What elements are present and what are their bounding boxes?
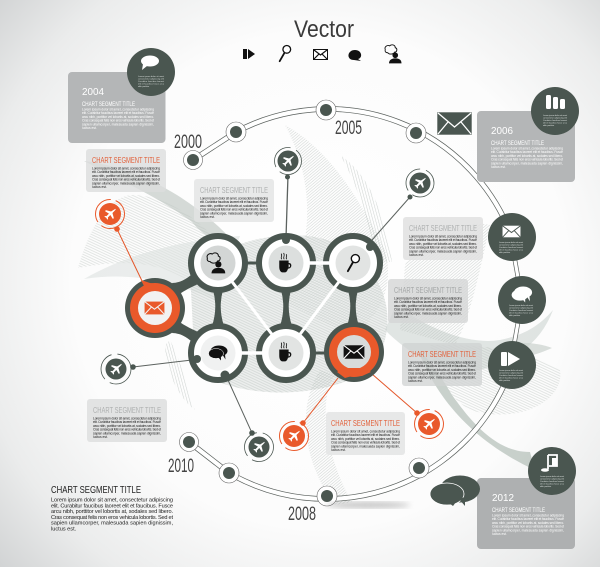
circle: 2004 chat: elit et faucibus fusce arcu [138,82,164,86]
hub ring: coffee bottom [259,326,313,380]
panel: 2006: elit. Curabitur faucibus laoreet elit et faucibus. Fusce [491,150,563,154]
text box: grey title top centre: Lorem ipsum dolor sit amet, consectetur adipiscing [200,196,268,200]
text block: bottom left: sapien ullamcorper, malesuada sapien dignissim, [51,521,173,527]
text box: grey title top centre: arcu nibh, porttitor vel lobortis at, sodales sed libero. [200,204,268,208]
text box: orange title right lower [402,343,482,386]
circle: mail: Lorem ipsum dolor sit amet [499,241,523,244]
text block: bottom left: elit. Curabitur faucibus laoreet elit et faucibus. Fusce [51,503,173,509]
panel: 2004: elit. Curabitur faucibus laoreet elit et faucibus. Fusce [82,111,154,115]
toolbar icons [243,45,402,63]
text box: grey title top centre: elit. Curabitur faucibus laoreet elit et faucibus. Fusce [200,200,268,204]
node 2010 start [180,432,198,452]
text box: orange title bottom centre: Lorem ipsum dolor sit amet, consectetur adipiscing [331,430,400,434]
text block: bottom left: Lorem ipsum dolor sit amet, consectetur adipiscing [51,498,173,504]
text box: grey title right upper: arcu nibh, porttitor vel lobortis at, sodales sed libero. [409,242,477,246]
text box: orange title bottom centre [326,412,405,455]
hub ring: person [191,236,245,290]
circle: 2006 bars: elit et faucibus fusce arcu [543,122,567,124]
node 2005 [316,100,336,120]
text box: grey title right upper: Cras consequat felis non eros vehicula lobortis. Sed et [409,246,477,250]
text box: grey title right middle: elit. Curabitur faucibus laoreet elit et faucibus. Fusce [394,300,462,304]
text box: orange title right lower: Lorem ipsum dolor sit amet, consectetur adipiscing [408,360,476,364]
text box: grey title right middle [388,279,468,323]
text box: orange title upper left: Cras consequat felis non eros vehicula lobortis. Sed et [92,178,160,182]
panel: 2006: arcu nibh, porttitor vel lobortis at, sodales sed libero. [491,154,563,158]
timeline ring [189,109,522,499]
panel: 2004: 2004 [82,87,104,98]
text box: orange title upper left: elit. Curabitur faucibus laoreet elit et faucibus. Fusce [92,170,160,174]
panel: 2004: Lorem ipsum dolor sit amet, consectetur adipiscing [82,108,154,112]
icon: mail [314,50,328,60]
node 2000 [226,122,246,142]
hub connectors: white breaks [230,263,341,353]
plane marker: orange bottom [280,420,308,450]
text box: orange title bottom centre: arcu nibh, porttitor vel lobortis at, sodales sed libero. [331,437,400,441]
text block: bottom left: CHART SEGMENT TITLE [51,484,141,496]
circle: 2006 bars: nibh porttitor [543,124,554,127]
text box: grey title right upper: sapien ullamcorper, malesuada sapien dignissim, [409,249,477,253]
text box: grey title lower left: arcu nibh, porttitor vel lobortis at, sodales sed libero. [93,424,161,428]
hub connectors: dark [172,262,359,354]
text box: grey title right middle: sapien ullamcorper, malesuada sapien dignissim, [394,311,462,315]
circle: mail: consectetur adipiscing elit [499,244,523,246]
circle: chat: nibh porttitor [509,314,520,317]
circle: mail: nibh porttitor [499,251,510,254]
text block: bottom left: arcu nibh, porttitor vel lobortis at, sodales sed libero. [51,509,173,515]
year 2010: 2010 [168,456,194,477]
text box: grey title lower left: luctus est. [93,435,108,439]
icon: person with cloud [385,45,402,63]
panel: 2006: CHART SEGMENT TITLE [491,140,544,147]
node 2008 [317,486,337,506]
panel: 2004: CHART SEGMENT TITLE [82,101,135,108]
text box: orange title bottom centre: luctus est. [331,448,346,452]
text box: grey title right middle: Cras consequat felis non eros vehicula lobortis. Sed et [394,308,462,312]
text box: orange title right lower: Cras consequat felis non eros vehicula lobortis. Sed et [408,372,476,376]
panel: 2004: luctus est. [82,126,97,130]
plane marker: orange left [96,200,124,232]
panel: 2006 [477,111,575,182]
icon: play [243,49,255,59]
text box: grey title right upper [403,217,483,260]
connector lines [117,175,417,433]
circle: mail: Curabitur faucibus laoreet [499,246,523,249]
text box: orange title bottom centre: sapien ullamcorper, malesuada sapien dignissim, [331,444,400,448]
text box: grey title right middle: CHART SEGMENT TITLE [394,286,462,295]
text box: grey title lower left: elit. Curabitur faucibus laoreet elit et faucibus. Fusce [93,420,161,424]
panel: 2004: sapien ullamcorper, malesuada sapien dignissim, [82,122,154,126]
panel: 2006: Lorem ipsum dolor sit amet, consectetur adipiscing [491,146,563,150]
shadow under ring [326,502,410,508]
text box: orange title right lower: CHART SEGMENT TITLE [408,350,476,359]
text box: grey title right middle: Lorem ipsum dolor sit amet, consectetur adipiscing [394,296,462,300]
text box: grey title top centre: luctus est. [200,215,215,219]
circle: mail: elit et faucibus fusce arcu [499,248,523,252]
circle: 2006 bars: consectetur adipiscing elit [543,116,567,120]
plane marker: left [101,354,136,384]
panel: 2012: elit. Curabitur faucibus laoreet elit et faucibus. Fusce [492,517,564,521]
panel: 2012: Lorem ipsum dolor sit amet, consectetur adipiscing [492,514,564,518]
circle: 2004 chat: Curabitur faucibus laoreet [138,80,164,83]
circle: 2012 music: elit et faucibus fusce arcu [540,482,564,486]
text box: grey title lower left [87,399,167,442]
node 2010 [219,463,239,483]
text box: orange title upper left: arcu nibh, porttitor vel lobortis at, sodales sed libero. [92,174,160,178]
circle: chat [498,276,546,324]
node 2000 start [184,150,202,170]
text box: orange title upper left [86,149,166,192]
text box: orange title right lower: elit. Curabitur faucibus laoreet elit et faucibus. Fusce [408,364,476,368]
panel: 2004 [68,72,166,143]
text box: orange title bottom centre: CHART SEGMENT TITLE [331,419,400,428]
panel: 2006: Cras consequat felis non eros vehicula lobortis. Sed et [491,158,563,162]
text box: grey title lower left: CHART SEGMENT TITLE [93,406,161,415]
plane marker: bottom [244,430,274,462]
hub ring: orange mail [125,278,185,338]
panel: 2012: 2012 [492,493,514,504]
circle: 2006 bars: Lorem ipsum dolor sit amet [543,114,567,117]
plane marker: top centre [274,148,302,180]
text box: grey title top centre: Cras consequat felis non eros vehicula lobortis. Sed et [200,208,268,212]
hub ring: coffee top [259,236,313,290]
text box: grey title right middle: luctus est. [394,315,409,319]
circle: 2012 music: Lorem ipsum dolor sit amet [540,475,564,478]
circle: 2012 music: nibh porttitor [540,485,551,488]
circle: play: Lorem ipsum dolor sit amet [499,369,523,372]
circle: chat: Lorem ipsum dolor sit amet [509,304,533,307]
text block: bottom left [51,484,173,532]
text box: grey title top centre: CHART SEGMENT TITLE [200,186,268,195]
circle: mail [488,213,536,261]
circle: 2006 bars: Curabitur faucibus laoreet [543,119,567,122]
panel: 2012: luctus est. [492,532,507,536]
node 2005 end [406,123,426,143]
plane marker: top right [406,169,434,200]
circle: play [488,341,536,389]
panel: 2006: sapien ullamcorper, malesuada sapien dignissim, [491,161,563,165]
circle: 2006 bars [531,87,579,135]
text box: grey title right upper: elit. Curabitur faucibus laoreet elit et faucibus. Fusce [409,238,477,242]
text box: orange title right lower: luctus est. [408,379,423,383]
text box: grey title right upper: CHART SEGMENT TITLE [409,224,477,233]
text box: grey title lower left: Cras consequat felis non eros vehicula lobortis. Sed et [93,428,161,432]
circle: chat: consectetur adipiscing elit [509,306,533,310]
icon: magnifier [280,45,291,61]
circle: play: Curabitur faucibus laoreet [499,374,523,377]
circle: play: consectetur adipiscing elit [499,372,523,374]
year 2008: 2008 [288,504,316,525]
abstract wave mesh [78,125,560,505]
text block: bottom left: luctus est. [51,526,77,532]
icon: large chat bubbles [430,476,480,506]
text box: grey title lower left: Lorem ipsum dolor sit amet, consectetur adipiscing [93,416,161,420]
circle: 2012 music: consectetur adipiscing elit [540,478,564,480]
text box: orange title upper left: luctus est. [92,185,107,189]
circle: 2004 chat [127,48,175,96]
icon: large envelope [437,112,472,135]
text box: grey title right upper: Lorem ipsum dolor sit amet, consectetur adipiscing [409,234,477,238]
circle: play: elit et faucibus fusce arcu [499,376,523,380]
circle: 2012 music [528,447,576,495]
hub ring: orange mail dark [324,322,384,382]
hub ring: magnifier [326,236,380,290]
circle: play: nibh porttitor [499,379,510,382]
panel: 2012: sapien ullamcorper, malesuada sapien dignissim, [492,528,564,532]
circle: 2004 chat: nibh porttitor [138,85,149,88]
circle: chat: elit et faucibus fusce arcu [509,312,533,314]
timeline nodes [180,100,429,506]
year 2000: 2000 [174,132,202,153]
text box: orange title bottom centre: Cras consequat felis non eros vehicula lobortis. Sed et [331,441,400,445]
icon: chat bubble [348,50,361,61]
title: Vector [294,16,354,43]
plane marker: orange right [414,410,444,438]
panel: 2012: arcu nibh, porttitor vel lobortis at, sodales sed libero. [492,521,564,525]
circle: 2012 music: Curabitur faucibus laoreet [540,480,564,483]
panel: 2012 [477,478,575,549]
circle: 2004 chat: Lorem ipsum dolor sit amet [138,75,164,78]
node 2008 end [409,458,429,478]
panel: 2006: 2006 [491,126,513,137]
panel: 2004: Cras consequat felis non eros vehicula lobortis. Sed et [82,119,154,123]
text box: grey title lower left: sapien ullamcorper, malesuada sapien dignissim, [93,431,161,435]
text box: grey title right middle: arcu nibh, porttitor vel lobortis at, sodales sed libero. [394,304,462,308]
text box: orange title bottom centre: elit. Curabitur faucibus laoreet elit et faucibus. Fusce [331,433,400,437]
panel: 2012: Cras consequat felis non eros vehicula lobortis. Sed et [492,525,564,529]
hub ring: chat [191,326,245,380]
panel: 2006: luctus est. [491,165,506,169]
text box: orange title right lower: arcu nibh, porttitor vel lobortis at, sodales sed libero. [408,368,476,372]
panel: 2012: CHART SEGMENT TITLE [492,507,545,514]
panel: 2004: arcu nibh, porttitor vel lobortis at, sodales sed libero. [82,115,154,119]
year labels [168,118,362,525]
text box: grey title top centre: sapien ullamcorper, malesuada sapien dignissim, [200,211,268,215]
text box: orange title upper left: Lorem ipsum dolor sit amet, consectetur adipiscing [92,166,160,170]
circle: 2004 chat: consectetur adipiscing elit [138,78,164,80]
text box: orange title upper left: CHART SEGMENT TITLE [92,156,160,165]
year 2005: 2005 [335,118,362,139]
circle: chat: Curabitur faucibus laoreet [509,309,533,312]
text box: orange title right lower: sapien ullamcorper, malesuada sapien dignissim, [408,375,476,379]
text box: orange title upper left: sapien ullamcorper, malesuada sapien dignissim, [92,181,160,185]
text box: grey title top centre [194,179,274,222]
text block: bottom left: Cras consequat felis non eros vehicula lobortis. Sed et [51,515,173,521]
text box: grey title right upper: luctus est. [409,253,424,257]
